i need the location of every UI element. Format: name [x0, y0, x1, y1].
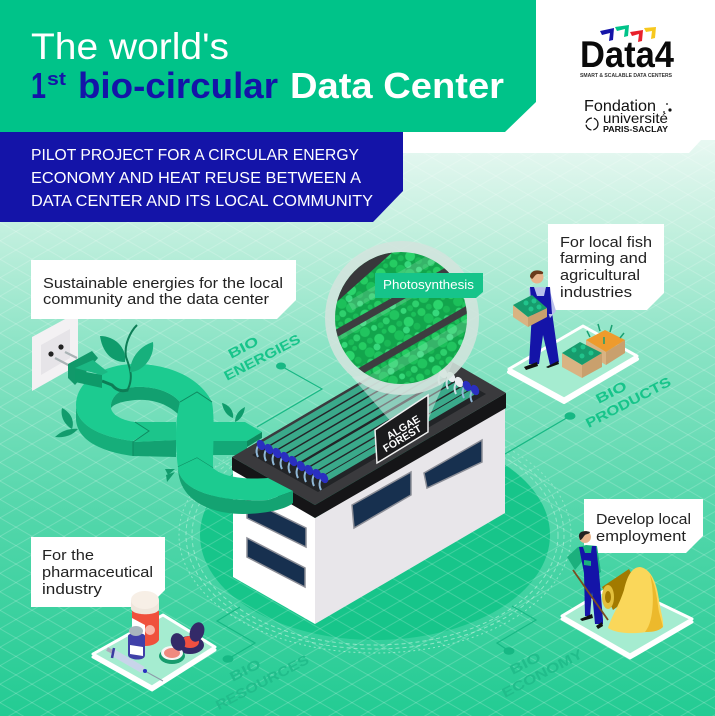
logo: Fondation Universite Paris-Saclay: université: [603, 110, 668, 126]
roof: [232, 393, 506, 518]
hay platform: [562, 567, 692, 658]
left wall: [233, 463, 315, 624]
logo: Fondation Universite Paris-Saclay: PARIS-SACLAY: [603, 125, 669, 134]
magnifier cone: [352, 362, 453, 432]
connector and label: bio products: [505, 374, 673, 454]
subtitle banner: PILOT PROJECT FOR A CIRCULAR ENERGY: [31, 147, 359, 164]
right wall: [315, 405, 505, 624]
connector and label: bio economy: ECONOMY: [499, 646, 585, 701]
icon: syringe: [107, 648, 163, 681]
callout: fish farming: farming and: [560, 250, 647, 267]
magnifier: photosynthesis close-up: [325, 231, 480, 395]
left lobe top surface: [76, 364, 212, 441]
bib pocket: [584, 560, 591, 566]
connector and label: bio resources: [213, 607, 311, 713]
callout: pharmaceutical: [31, 537, 165, 607]
icon: plant leaves: [55, 325, 245, 482]
title: 1: [31, 65, 46, 106]
algae forest sign: FOREST: [381, 422, 424, 455]
icon: hay bale: [602, 569, 640, 610]
shirt: [567, 545, 601, 581]
infinity arrows: lower arc over building: [178, 458, 293, 514]
middle band: [176, 392, 214, 468]
title: st: [47, 69, 66, 89]
left lobe side wall: [76, 405, 133, 456]
title: bio-circular: [78, 65, 278, 106]
ground disc under the building: [179, 417, 571, 653]
right arrow segment: [213, 422, 262, 455]
icon: vial: [128, 626, 145, 660]
overalls: [579, 546, 603, 624]
icon: cream compacts: [159, 620, 207, 664]
shirt: [529, 287, 556, 318]
title: The world's: [31, 26, 229, 67]
left lobe inner wall: [111, 387, 180, 414]
connector and label: bio products: PRODUCTS: [583, 374, 673, 431]
bio products platform: [509, 324, 637, 402]
algae tubes: [260, 359, 473, 480]
photosynthesis tag: Photosynthesis: [383, 278, 474, 292]
connector and label: bio resources: BIO: [227, 656, 263, 685]
middle lower-left segment: [133, 422, 176, 457]
icon: hay mound: [608, 567, 663, 633]
callout: fish farming: [548, 224, 664, 310]
white top-right logo panel: [403, 0, 715, 153]
dark joints: [178, 392, 213, 468]
head: [579, 531, 591, 543]
connector and label: bio energies: BIO: [226, 333, 261, 361]
rake: [573, 570, 608, 620]
connector and label: bio economy: BIO: [507, 649, 543, 678]
connector and label: bio energies: [222, 331, 322, 427]
header banner: [0, 0, 536, 132]
callout: pharmaceutical: industry: [42, 581, 103, 598]
title: Data Center: [290, 65, 504, 106]
callout: local employment: [584, 499, 703, 553]
connector and label: bio energies: ENERGIES: [222, 331, 303, 383]
callout: fish farming: agricultural: [560, 267, 640, 284]
icon: medicine bottle: [131, 591, 159, 646]
algae forest sign: ALGAE: [385, 413, 422, 442]
legs and overalls: [529, 312, 559, 365]
callout: fish farming: industries: [560, 284, 632, 301]
photosynthesis tag: [375, 273, 483, 298]
infinity arrows: back segments: [76, 364, 262, 468]
connector and label: bio economy: [497, 606, 585, 701]
icon: green crate: [562, 342, 602, 378]
box: [513, 305, 528, 327]
algae forest sign: [375, 395, 428, 463]
callout: pharmaceutical: pharmaceutical: [42, 564, 153, 581]
lower blue coils: [255, 438, 330, 490]
upper coils: [437, 366, 481, 402]
logo: Fondation Universite Paris-Saclay: [584, 98, 672, 134]
callout: sustainable energies: Sustainable energies for the local: [43, 275, 283, 292]
callout: local employment: Develop local: [596, 511, 691, 528]
subtitle banner: DATA CENTER AND ITS LOCAL COMMUNITY: [31, 193, 373, 210]
shoes: [580, 614, 593, 621]
connector and label: bio products: BIO: [593, 378, 629, 407]
subtitle banner: [0, 132, 403, 222]
shoes: [524, 362, 538, 370]
callout: local employment: employment: [596, 528, 687, 545]
pharma platform: [93, 591, 215, 690]
callout: sustainable energies: community and the data center: [43, 291, 269, 308]
title: [31, 26, 504, 106]
logo: Fondation Universite Paris-Saclay: Fondation: [584, 98, 656, 115]
building: [232, 345, 506, 624]
icon: plug and cord: [68, 351, 128, 391]
logo: Data4: SMART & SCALABLE DATA CENTERS: [580, 73, 672, 79]
connector and label: bio resources: RESOURCES: [213, 652, 311, 713]
subtitle banner: ECONOMY AND HEAT REUSE BETWEEN A: [31, 170, 362, 187]
callout: fish farming: For local fish: [560, 234, 652, 251]
head: [530, 270, 544, 284]
icon: wall socket: [32, 312, 78, 391]
callout: pharmaceutical: For the: [42, 547, 94, 564]
logo: Data4: Data4: [580, 34, 674, 75]
windows: [247, 440, 482, 587]
callout: sustainable energies: [31, 260, 296, 319]
farm worker figure with rake: [567, 531, 608, 629]
icon: orange crate: [586, 324, 625, 365]
fish farmer figure: [513, 270, 559, 370]
